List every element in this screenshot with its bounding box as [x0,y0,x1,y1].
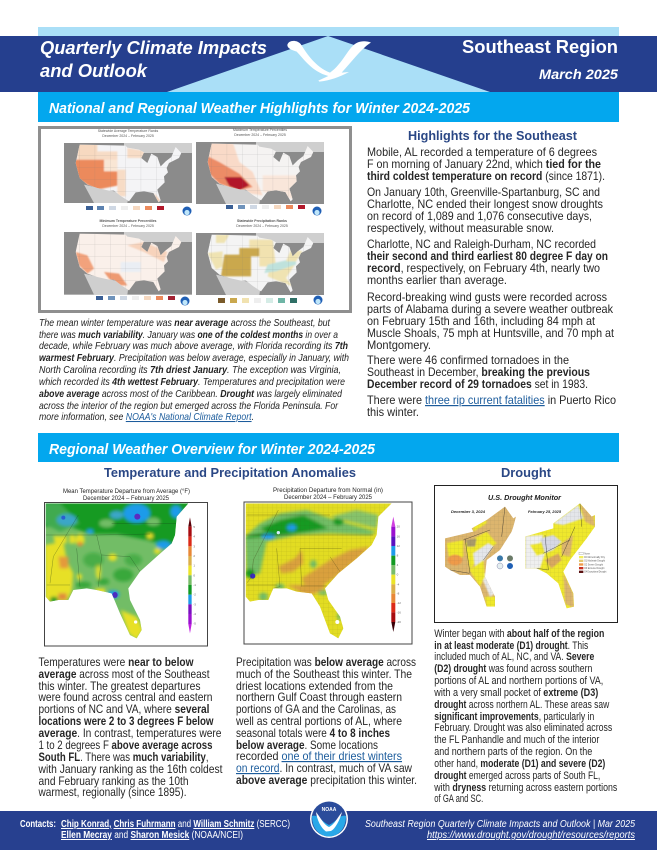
color scale: 1 [193,564,195,568]
chart: mean temperature departure map: December 2024 – February 2025 [83,495,169,502]
text block: southeast highlights: December record of 29 tornadoes set in 1983. [367,377,588,391]
color scale: 0 [193,573,195,577]
text block: drought narrative [433,628,617,805]
text block: drought narrative: (D2) drought was found across southern [434,663,592,675]
map: statewide average temperature ranks: December 2024 – February 2025 [102,134,154,138]
color scale: 20 [397,525,400,529]
section bar: regional weather overview: Regional Weather Overview for Winter 2024-2025 [49,441,376,458]
map: December drought [445,506,516,607]
text block: southeast highlights: There were 46 confirmed tornadoes in the [367,353,569,367]
text block: precipitation narrative: much of the Southeast this winter. The [236,668,412,681]
text block: southeast highlights: on February 15th and 16th, including 84 mph at [367,314,596,328]
text block: drought narrative: portions of AL and northern portions of VA, [434,675,603,687]
text block: southeast highlights: There were three rip current fatalities in Puerto Rico [367,393,616,407]
region and date: March 2025 [539,66,618,82]
text block: national summary caption: across the interior of the region but emerged across the Florida Peninsula. For [39,401,338,412]
color scale: 12 [397,544,400,548]
map: statewide precipitation ranks: December 2024 – February 2025 [236,224,288,228]
text block: precipitation narrative: recorded one of their driest winters [236,750,402,763]
text block: southeast highlights: respectively, without measurable snow. [367,221,554,235]
legend swatches [86,205,305,303]
color scale [188,517,196,633]
text block: temperature narrative: with January ranking as the 16th coldest [38,763,223,776]
map: maximum temperature percentiles [196,128,324,204]
icon: NOAA logo: NOAA [322,807,337,813]
text block: national summary caption: above average across most of the Caribbean. Drought was largely eliminated [39,389,343,400]
text block: southeast highlights: parts of Alabama during a severe weather outbreak [367,302,614,316]
text block: precipitation narrative: portions of GA and the Carolinas, as [236,703,396,716]
chart: precipitation departure map [243,487,412,644]
text block: temperature narrative: average. In contrast, temperatures were [38,727,222,740]
text block: temperature narrative: Temperatures were near to below [38,656,194,669]
color scale: 2 [193,554,195,558]
text block: precipitation narrative: seasonal totals were 4 to 8 inches [236,727,390,740]
text block: southeast highlights: on record of 1,089 and 1,076 consecutive days, [367,209,592,223]
header triangle [167,36,490,92]
icon: NOAA logo [310,800,348,838]
text block: southeast highlights: Southeast in December, breaking the previous [367,365,590,379]
text block: temperature narrative: locations were 2 to 3 degrees F below [38,715,214,728]
text block: national summary caption [39,318,349,423]
color scale [391,517,401,632]
text block: southeast highlights: Montgomery. [367,338,431,352]
text block: southeast highlights: Charlotte, NC and Raleigh-Durham, NC recorded [367,237,596,251]
text block: national summary caption: which recorded its 4th wettest February. Temperatures and precipitation were [39,377,345,388]
text block: precipitation narrative: below average. Some locations [236,739,378,752]
color scale: -4 [193,612,196,616]
panel: national rank maps [38,126,352,313]
contacts: Chip Konrad, Chris Fuhrmann and William Schmitz (SERCC) [61,819,290,830]
title: Quarterly Climate Impacts [40,38,267,58]
chart: precipitation departure map: Precipitation Departure from Normal (in) [273,487,383,494]
color scale: -4 [397,582,400,586]
chart: mean temperature departure map: Mean Temperature Departure from Average (°F) [63,487,190,495]
color scale: -16 [397,610,401,614]
text block: precipitation narrative: northern Gulf Coast through eastern [236,691,402,704]
heading: drought: Drought [501,465,552,480]
icons: small NOAA logos [180,206,322,306]
text block: drought narrative: other hand, moderate (D1) and severe (D2) [434,758,605,770]
color scale: -12 [397,601,401,605]
map: minimum temperature percentiles: Minimum Temperature Percentiles [100,219,157,223]
icon: white bird [287,41,371,82]
color scale: 4 [193,535,195,539]
color scale: -2 [193,593,196,597]
drought legend: D2 Severe Drought [584,563,603,566]
heading: highlights for the southeast: Highlights for the Southeast [408,128,578,143]
color scale: -5 [193,622,196,626]
chart: precipitation departure map: December 2024 – February 2025 [284,494,372,501]
drought legend: None [584,553,591,555]
text block: drought narrative: in at least moderate (D1) drought. This [434,640,588,652]
text block: southeast highlights: this winter. [367,405,419,419]
map: statewide average temperature ranks [64,129,192,203]
text block: drought narrative: February. Drought was also eliminated across [434,722,612,734]
text block: precipitation narrative: above average precipitation this winter. [236,774,417,787]
map: statewide average temperature ranks: Statewide Average Temperature Ranks [98,129,159,133]
heading: temperature and precipitation anomalies: Temperature and Precipitation Anomalies [104,465,356,480]
text block: precipitation narrative [235,656,417,787]
map: maximum temperature percentiles: Maximum Temperature Percentiles [233,128,287,132]
report citation [365,819,635,841]
chart: U.S. Drought Monitor panel [434,486,618,622]
text block: temperature narrative: and February ranking as the 10th [38,775,188,788]
text block: drought narrative: of GA and SC. [434,793,483,805]
chart: U.S. Drought Monitor panel: December 3, 2024 [451,509,486,514]
color scale: 0 [397,573,399,577]
color scale: -20 [397,620,401,624]
text block: national summary caption: more information, see NOAA's National Climate Report. [39,412,254,423]
footer band [0,811,657,850]
text block: precipitation narrative: Precipitation was below average across [236,656,416,669]
text block: national summary caption: North Carolina recording its 7th driest January. The exception was Virginia, [39,365,341,376]
drought legend [579,552,607,574]
text block: temperature narrative: portions of NC and VA, where several [38,703,210,716]
text block: southeast highlights [367,145,616,419]
text block: national summary caption: there was much variability. January was one of the coldest months in over a [39,330,338,341]
text block: precipitation narrative: on record. In contrast, much of VA saw [236,762,413,775]
text block: national summary caption: decade, while February was much above average, with Florida recording its 7th [39,341,348,352]
contacts [20,819,290,841]
map: minimum temperature percentiles [64,219,192,295]
text block: southeast highlights: months earlier than average. [367,273,507,287]
color scale: 4 [397,563,399,567]
text block: drought narrative: the FL Panhandle and much of the interior [434,734,600,746]
color scale: -3 [193,602,196,606]
map: statewide precipitation ranks [196,219,324,295]
chart: mean temperature departure map [43,487,208,646]
map: February drought [523,502,598,610]
text block: drought narrative: included much of AL, NC, and VA. Severe [434,651,594,663]
region and date [462,37,618,82]
drought legend: D0 Abnormally Dry [584,556,606,559]
contacts: Contacts: [20,819,56,830]
color scale: 16 [397,534,400,538]
region and date: Southeast Region [462,37,618,57]
report citation: https://www.drought.gov/drought/resources/reports [427,830,635,841]
drought legend: D3 Extreme Drought [584,567,605,570]
map: minimum temperature percentiles: December 2024 – February 2025 [102,224,154,228]
text block: drought narrative: with dryness returning across eastern portions [433,782,617,794]
text block: precipitation narrative: well as central portions of AL, where [235,715,402,728]
text block: temperature narrative: were found across central and eastern [38,691,212,704]
text block: drought narrative: drought across northern AL. These areas saw [434,699,610,711]
color scale: 3 [193,544,195,548]
text block: temperature narrative [38,656,223,799]
text block: drought narrative: with a very small pocket of extreme (D3) [433,687,598,699]
text block: temperature narrative: warmest, regionally (since 1895). [38,786,186,799]
contacts: Ellen Mecray and Sharon Mesick (NOAA/NCEI) [61,830,243,841]
chart: U.S. Drought Monitor panel: February 25, 2025 [528,509,562,514]
color scale: -1 [193,583,196,587]
drought legend: D4 Exceptional Drought [584,571,607,574]
title [40,38,267,81]
text block: southeast highlights: On January 10th, Greenville-Spartanburg, SC and [367,185,600,199]
text block: precipitation narrative: driest locations extended from the [236,680,393,693]
section bar: national and regional highlights: National and Regional Weather Highlights for Winter 2024-2025 [49,100,471,117]
text block: southeast highlights: F on morning of January 22nd, which tied for the [367,157,601,171]
text block: southeast highlights: third coldest temperature on record (since 1871). [367,169,605,183]
map: maximum temperature percentiles: December 2024 – February 2025 [234,133,286,137]
text block: temperature narrative: 1 to 2 degrees F above average across [38,739,212,752]
text block: drought narrative: drought emerged across parts of South FL, [434,770,600,782]
drought legend: D1 Moderate Drought [584,560,605,563]
color scale: -8 [397,592,400,596]
icons: agency logos [497,555,513,569]
text block: drought narrative: Winter began with about half of the region [434,628,604,640]
section bar: regional weather overview [38,433,619,462]
text block: drought narrative: and northern parts of the region. On the [434,746,592,758]
text block: southeast highlights: Muscle Shoals, 75 mph at Huntsville, and 70 mph at [367,326,615,340]
text block: southeast highlights: record, respectively, on February 4th, nearly two [367,261,600,275]
chart: U.S. Drought Monitor panel: U.S. Drought Monitor [488,493,562,502]
text block: temperature narrative: average across most of the Southeast [38,668,210,681]
map: statewide precipitation ranks: Statewide Precipitation Ranks [237,219,287,223]
text block: southeast highlights: their second and third earliest 80 degree F day on [367,249,608,263]
text block: drought narrative: significant improvements, particularly in [434,711,594,723]
text block: southeast highlights: Mobile, AL recorded a temperature of 6 degrees [367,145,597,159]
text block: national summary caption: warmest February. Precipitation was below average, especially in January, with [39,353,349,364]
color scale: 8 [397,554,399,558]
title: and Outlook [40,61,148,81]
color scale: 5 [193,525,195,529]
text block: temperature narrative: this winter. The greatest departures [38,680,201,693]
text block: temperature narrative: South FL. There was much variability, [38,751,208,764]
section bar: national and regional highlights [38,92,619,122]
text block: national summary caption: The mean winter temperature was near average across the Southeast, but [39,318,331,329]
header band [0,27,657,92]
text block: southeast highlights: Record-breaking wind gusts were recorded across [367,290,607,304]
text block: southeast highlights: Charlotte, NC ended their longest snow droughts [367,197,603,211]
